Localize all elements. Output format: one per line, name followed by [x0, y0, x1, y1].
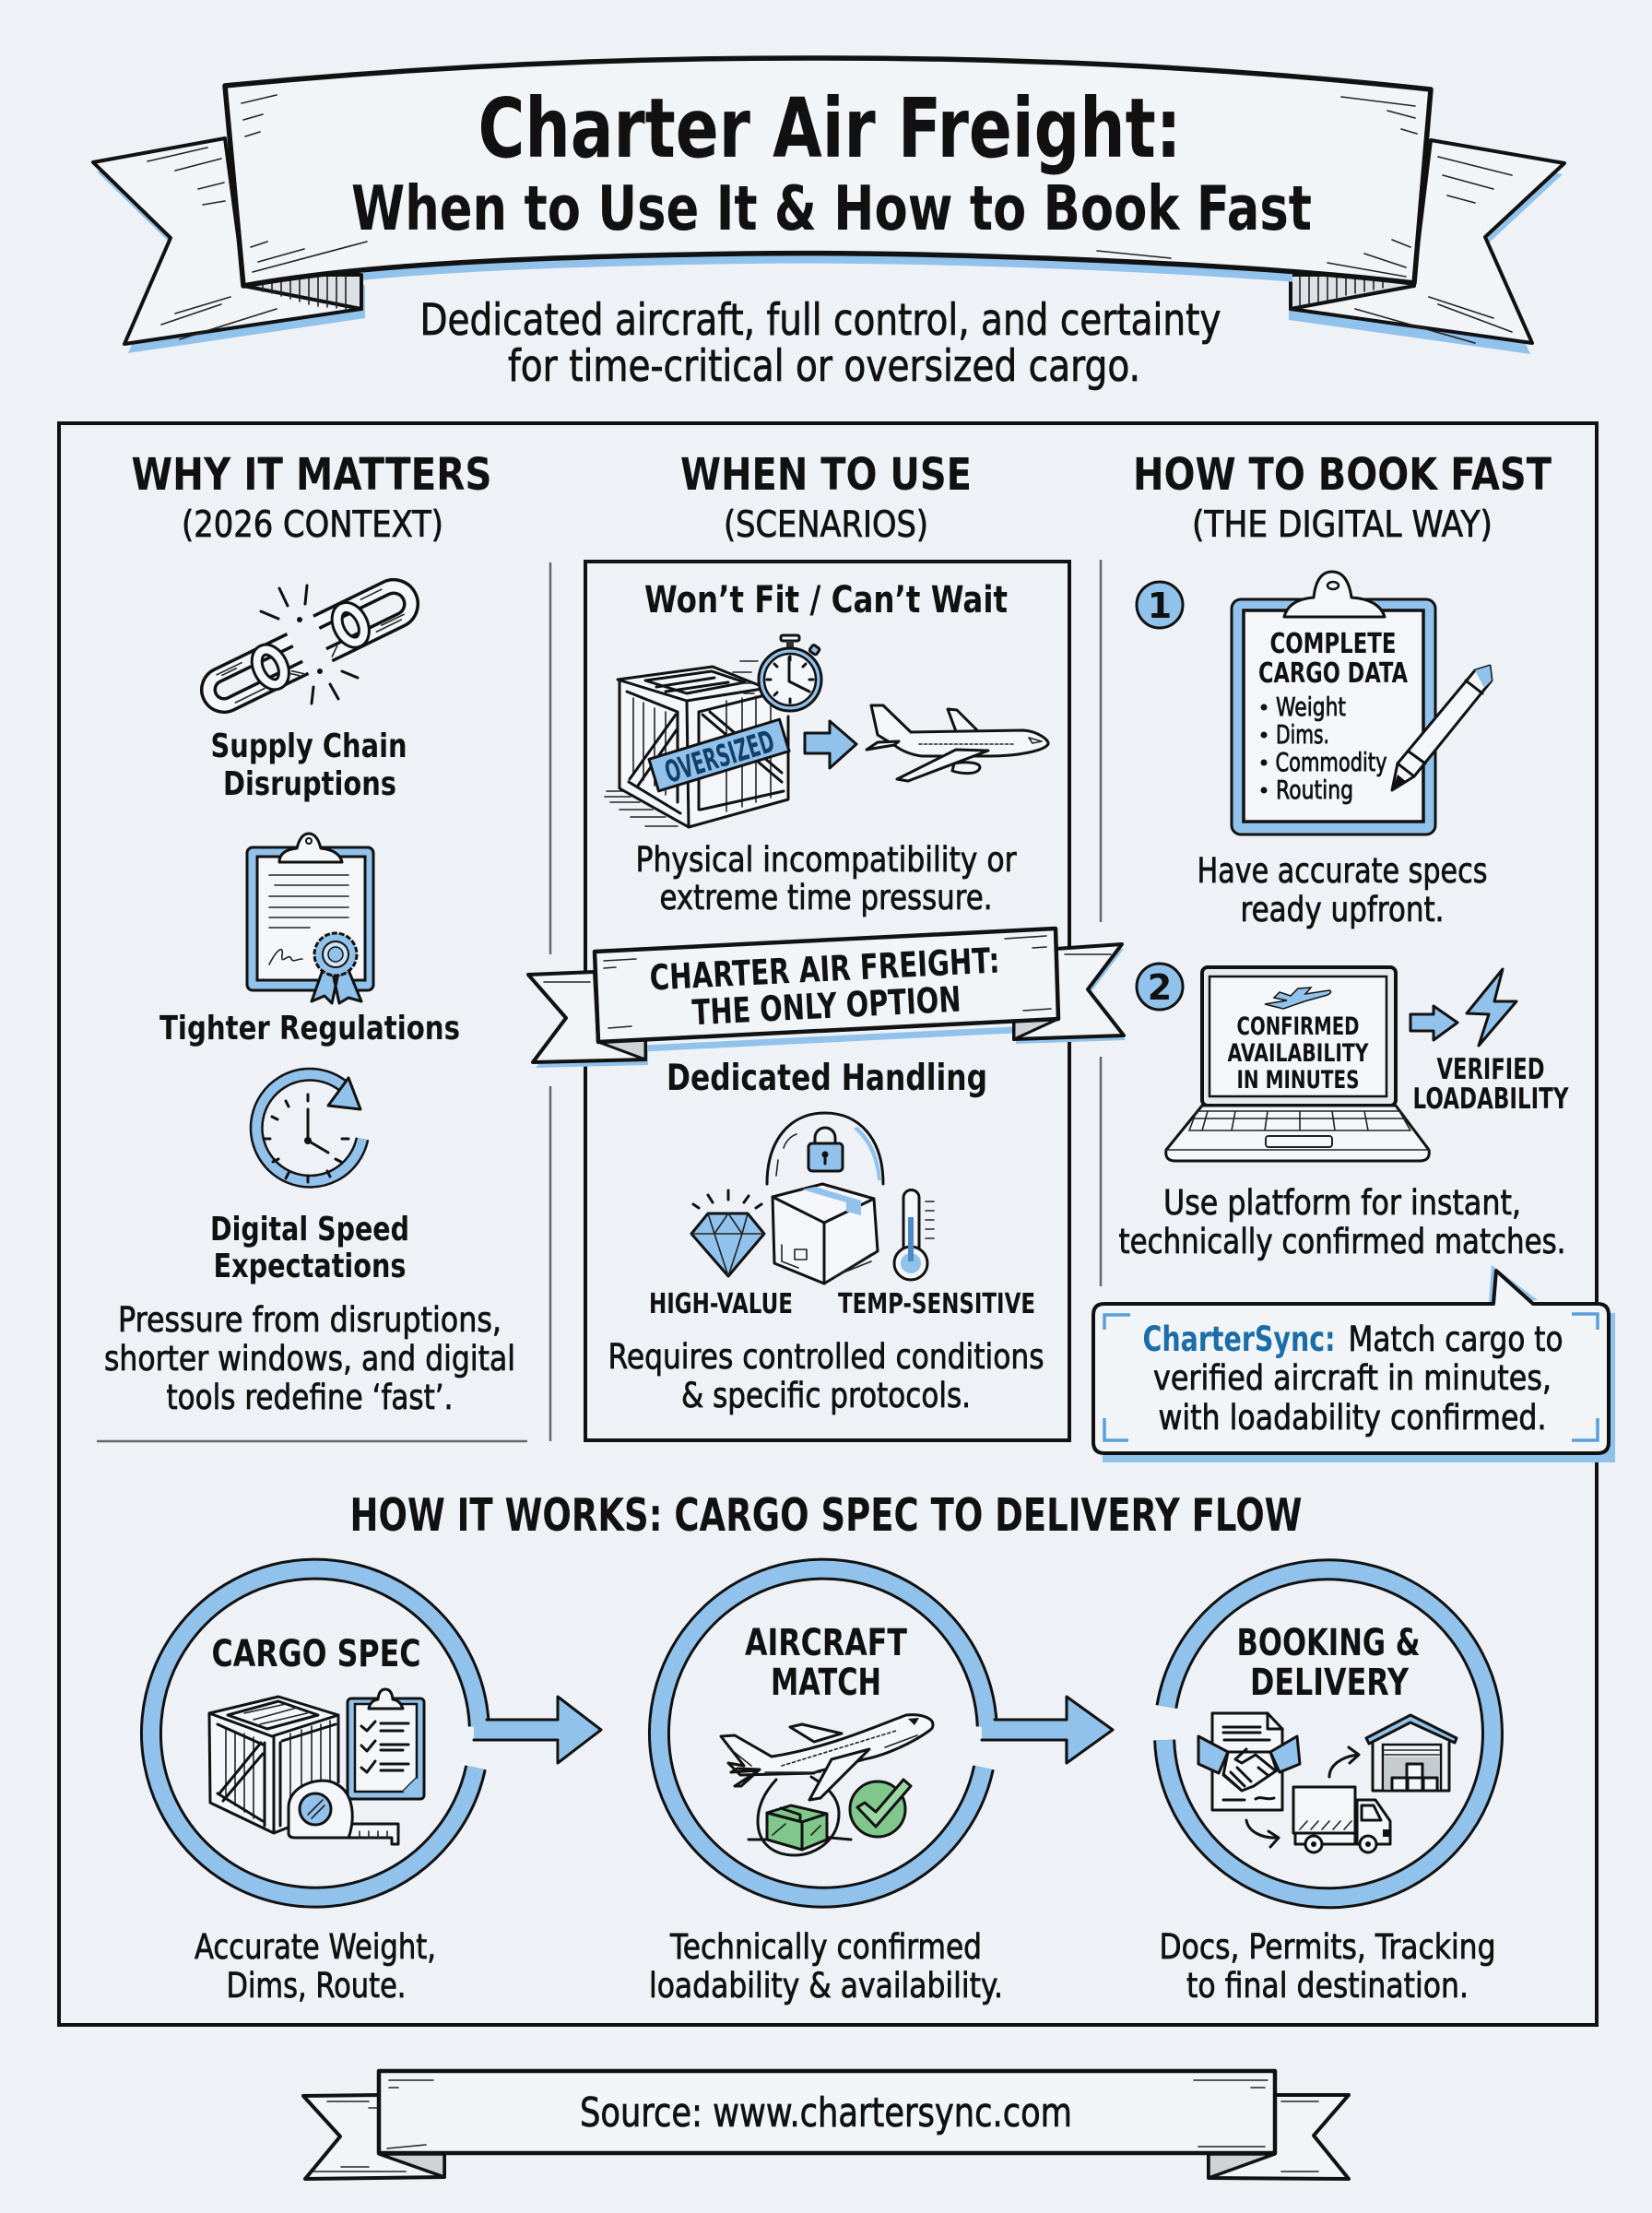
scenario box: [585, 562, 1069, 1440]
heading: why it matters: (2026 CONTEXT): [182, 504, 443, 546]
heading: why it matters: WHY IT MATTERS: [131, 449, 492, 501]
step title: DELIVERY: [1250, 1662, 1410, 1704]
laptop screen text: [1228, 1012, 1369, 1095]
icon: documents, handshake, truck, warehouse: [1198, 1713, 1457, 1852]
text: use platform: [1119, 1183, 1565, 1261]
clipboard bullets: [1261, 692, 1386, 805]
heading: why it matters: [131, 449, 492, 546]
arrow: laptop to lightning: [1410, 1006, 1457, 1040]
main frame: [59, 423, 1597, 2025]
laptop screen text: CONFIRMED: [1237, 1012, 1359, 1041]
heading: when to use: WHEN TO USE: [680, 449, 972, 501]
heading: how to book fast: (THE DIGITAL WAY): [1192, 504, 1493, 546]
text: pressure summary: [104, 1300, 515, 1417]
label: tighter regulations: Tighter Regulations: [159, 1010, 460, 1047]
heading: when to use: (SCENARIOS): [724, 504, 928, 546]
panel: how to book fast: [1093, 449, 1615, 1462]
ring with arrow: [659, 1569, 1113, 1898]
text: use platform: technically confirmed matches.: [1119, 1222, 1565, 1261]
step text: Docs, Permits, Tracking: [1160, 1927, 1495, 1967]
step text: Technically confirmed: [669, 1927, 982, 1967]
icon: airplane: [867, 705, 1048, 781]
subtitle: for time-critical or oversized cargo.: [508, 341, 1140, 392]
labels: high-value and temp-sensitive: HIGH-VALUE: [649, 1288, 793, 1320]
text: physical incompatibility: [636, 840, 1017, 917]
callout text: with loadability confirmed.: [1158, 1398, 1547, 1438]
step title: [745, 1622, 908, 1704]
step title: [1237, 1622, 1420, 1704]
flow step 1: cargo spec: [151, 1569, 601, 2006]
label: verified loadability: LOADABILITY: [1412, 1083, 1569, 1116]
callout text: verified aircraft in minutes,: [1153, 1358, 1552, 1398]
plane on screen: [1265, 988, 1331, 1009]
arrow: crate to plane: [805, 721, 856, 768]
panel: why it matters: [104, 449, 515, 1417]
callout text: Match cargo to: [1348, 1320, 1564, 1359]
source text: Source: www.chartersync.com: [580, 2089, 1072, 2136]
heading: when to use: [680, 449, 972, 546]
clipboard bullets: Commodity: [1276, 747, 1386, 777]
stamp: oversized label: [649, 719, 790, 794]
text: physical incompatibility: Physical incompatibility or: [636, 840, 1017, 880]
label: digital speed expectations: Digital Speed: [210, 1211, 409, 1249]
subtitle: [420, 295, 1221, 392]
text: pressure summary: Pressure from disruptions,: [118, 1300, 502, 1340]
icon: broken chain: [202, 580, 419, 715]
step badge 1: 1: [1148, 586, 1172, 626]
ribbon text: THE ONLY OPTION: [691, 979, 962, 1033]
heading: won't fit: Won’t Fit / Can’t Wait: [644, 579, 1008, 621]
clipboard bullets: Weight: [1276, 692, 1346, 722]
step title: MATCH: [771, 1662, 881, 1704]
icon: protected box with diamond and thermometer: [691, 1113, 934, 1284]
heading: dedicated handling: Dedicated Handling: [667, 1058, 987, 1099]
flow step 2: aircraft match: [649, 1569, 1113, 2006]
text: use platform: Use platform for instant,: [1163, 1183, 1521, 1223]
step text: Accurate Weight,: [195, 1927, 436, 1967]
source banner: [303, 2071, 1349, 2179]
clipboard bullets: Routing: [1276, 775, 1353, 805]
callout: chartersync: [1093, 1265, 1615, 1462]
step badge 1: [1137, 582, 1183, 628]
step text: [1160, 1927, 1495, 2006]
label: digital speed expectations: Expectations: [214, 1248, 406, 1285]
icon: pencil: [1392, 666, 1492, 790]
label: supply chain disruptions: Supply Chain: [210, 728, 407, 765]
heading: how to book fast: HOW TO BOOK FAST: [1133, 449, 1552, 501]
step text: [649, 1927, 1003, 2006]
stamp: oversized label: OVERSIZED: [660, 723, 778, 790]
text: accurate specs: [1197, 851, 1488, 929]
callout text: CharterSync:: [1143, 1320, 1335, 1359]
heading: how to book fast: [1133, 449, 1552, 546]
clipboard heading: [1258, 628, 1409, 690]
icon: laptop: [1166, 967, 1429, 1161]
text: pressure summary: tools redefine ‘fast’.: [166, 1378, 454, 1417]
step title: AIRCRAFT: [745, 1622, 908, 1664]
label: verified loadability: VERIFIED: [1436, 1053, 1545, 1086]
text: accurate specs: Have accurate specs: [1197, 851, 1488, 891]
flow step 3: booking and delivery: [1160, 1569, 1495, 2006]
column dividers: [97, 560, 1101, 1441]
step text: loadability & availability.: [649, 1966, 1003, 2006]
icon: clock with circular arrow: [256, 1074, 362, 1182]
label: digital speed expectations: [210, 1211, 409, 1285]
label: supply chain disruptions: [210, 728, 407, 803]
icon: cargo data clipboard: [1232, 572, 1492, 834]
text: pressure summary: shorter windows, and digital: [104, 1339, 515, 1379]
clipboard heading: COMPLETE: [1270, 628, 1396, 660]
step text: to final destination.: [1186, 1966, 1469, 2006]
subtitle: Dedicated aircraft, full control, and certainty: [420, 295, 1221, 346]
step title: CARGO SPEC: [212, 1633, 420, 1675]
ribbon text: [649, 940, 1002, 1035]
ring with arrow: [151, 1569, 601, 1898]
icon: plane, cargo, check: [721, 1715, 933, 1855]
ribbon text: CHARTER AIR FREIGHT:: [649, 940, 1000, 999]
clipboard bullets: Dims.: [1276, 719, 1329, 750]
text: requires controlled conditions: & specific protocols.: [681, 1376, 971, 1415]
text: requires controlled conditions: Requires controlled conditions: [608, 1337, 1044, 1377]
clipboard heading: CARGO DATA: [1258, 657, 1409, 690]
heading: how it works: HOW IT WORKS: CARGO SPEC TO DELIVERY FLOW: [350, 1489, 1302, 1542]
icon: crate, checklist, tape measure: [209, 1689, 424, 1844]
label: verified loadability: [1412, 1053, 1569, 1116]
icon: lightning bolt: [1467, 969, 1516, 1046]
text: physical incompatibility: extreme time pressure.: [660, 878, 992, 917]
labels: high-value and temp-sensitive: TEMP-SENSITIVE: [838, 1288, 1035, 1320]
icon: oversized crate with stopwatch: [605, 635, 821, 827]
step badge 2: 2: [1148, 967, 1172, 1008]
laptop screen text: AVAILABILITY: [1228, 1039, 1369, 1068]
panel: when to use: [528, 449, 1126, 1440]
ring: [1164, 1569, 1493, 1898]
labels: high-value and temp-sensitive: [649, 1288, 1035, 1320]
step title: BOOKING &: [1237, 1622, 1420, 1664]
step badge 2: [1137, 964, 1183, 1010]
laptop screen text: IN MINUTES: [1237, 1066, 1359, 1095]
title line 2: When to Use It & How to Book Fast: [351, 172, 1312, 244]
ribbon: charter air freight the only option: [528, 929, 1126, 1068]
step text: [195, 1927, 436, 2006]
title line 1: Charter Air Freight:: [478, 80, 1182, 176]
step text: Dims, Route.: [227, 1966, 406, 2006]
title banner: [93, 58, 1564, 354]
icon: clipboard with certificate seal: [247, 834, 373, 1003]
text: accurate specs: ready upfront.: [1241, 890, 1444, 929]
callout text: [1143, 1320, 1564, 1438]
text: requires controlled conditions: [608, 1337, 1044, 1415]
label: supply chain disruptions: Disruptions: [223, 765, 396, 803]
